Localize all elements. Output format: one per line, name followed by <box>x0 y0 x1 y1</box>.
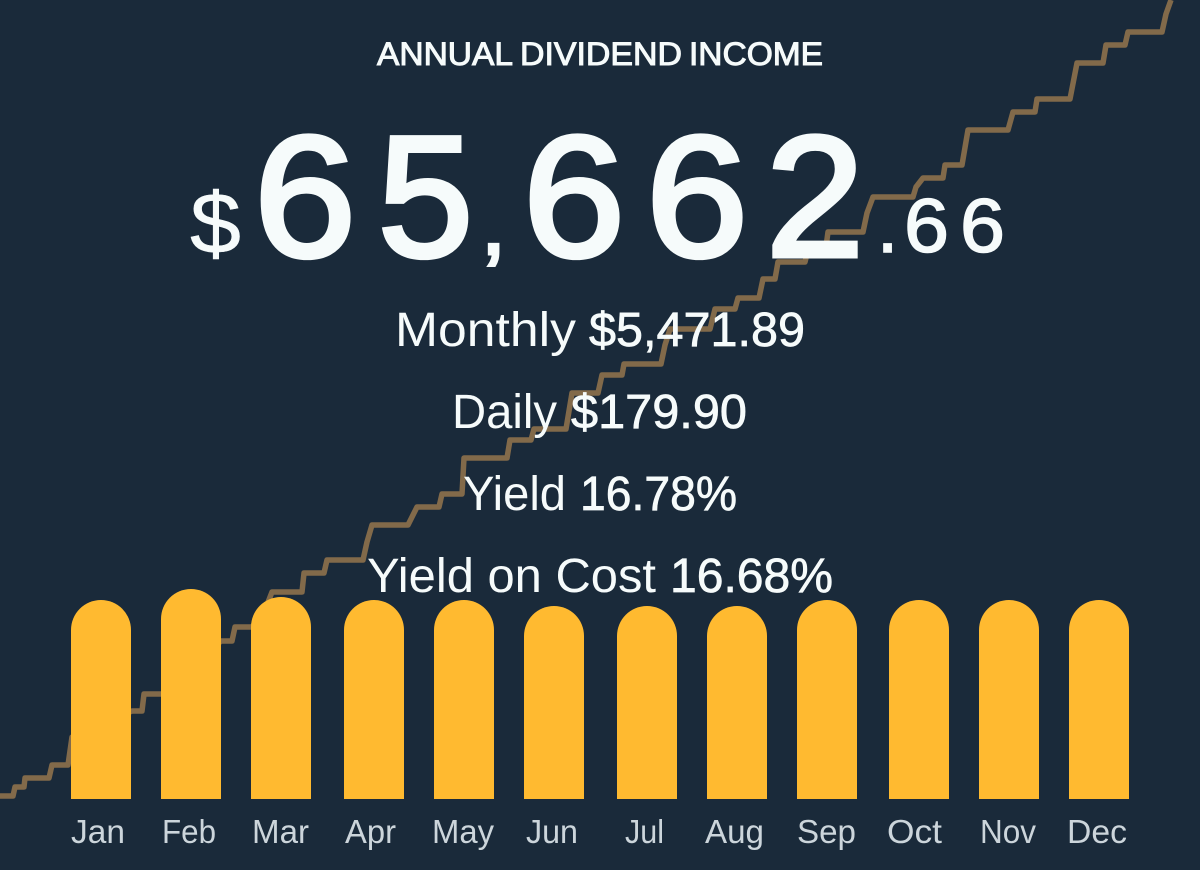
title <box>377 36 823 72</box>
month labels: May <box>432 813 494 850</box>
title: DIVIDEND <box>520 36 682 72</box>
title: ANNUAL <box>377 36 513 72</box>
yield stat: 16.78% <box>580 468 737 521</box>
monthly stat <box>395 304 805 357</box>
yield on cost stat: Yield on Cost <box>367 550 656 603</box>
month labels: Oct <box>887 813 942 850</box>
annual income amount: 5 <box>378 101 473 293</box>
annual income amount: 6 <box>960 184 1005 269</box>
yield on cost stat <box>367 550 833 603</box>
annual income amount <box>190 101 1005 293</box>
yield stat <box>463 468 737 521</box>
month labels: Dec <box>1067 813 1127 850</box>
annual income amount: $ <box>190 176 241 272</box>
annual income amount: , <box>481 174 506 274</box>
month labels <box>71 813 1127 850</box>
month labels: Aug <box>705 813 764 850</box>
month labels: Mar <box>252 813 309 850</box>
yield on cost stat: 16.68% <box>670 550 833 603</box>
daily stat: Daily <box>452 386 557 439</box>
daily stat: $179.90 <box>571 386 747 439</box>
monthly stat: $5,471.89 <box>589 304 805 357</box>
annual income amount: 2 <box>766 101 864 293</box>
yield stat: Yield <box>463 468 566 521</box>
month labels: Apr <box>345 813 396 850</box>
month labels: Sep <box>797 813 856 850</box>
annual income amount: 6 <box>904 184 949 269</box>
month labels: Jun <box>526 813 578 850</box>
daily stat <box>452 386 747 439</box>
annual income amount: 6 <box>523 101 625 293</box>
month labels: Nov <box>980 813 1036 850</box>
month labels: Jan <box>71 813 125 850</box>
monthly bar chart <box>71 589 1129 799</box>
month labels: Feb <box>162 813 216 850</box>
monthly stat: Monthly <box>395 304 576 357</box>
title: INCOME <box>689 36 823 72</box>
annual income amount: . <box>877 184 898 269</box>
annual income amount: 6 <box>646 101 748 293</box>
annual income amount: 6 <box>254 101 356 293</box>
month labels: Jul <box>625 813 664 850</box>
